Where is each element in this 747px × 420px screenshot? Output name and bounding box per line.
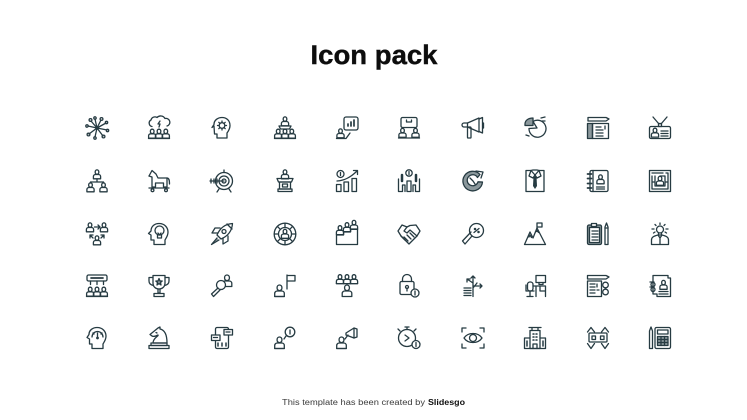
footer credit: Slidesgo bbox=[428, 398, 465, 407]
icon: chess knight bbox=[149, 327, 169, 348]
icon: megaphone bbox=[462, 118, 484, 138]
icon: team and leader bbox=[336, 275, 358, 296]
icon: clock arrow bbox=[463, 171, 483, 191]
icon: team exchange bbox=[86, 223, 108, 245]
icon: person with coin bbox=[275, 327, 295, 348]
title: Icon pack bbox=[310, 40, 439, 70]
icon: trophy bbox=[149, 276, 169, 296]
icon grid bbox=[86, 116, 671, 348]
icon: idea person bbox=[652, 223, 668, 244]
icon: board and three people bbox=[86, 275, 108, 296]
icon: rocket bbox=[212, 224, 232, 244]
icon: notepad and pencil bbox=[588, 276, 609, 296]
icon: office building bbox=[524, 328, 546, 348]
icon: handshake bbox=[398, 225, 420, 244]
icon: head with gauge bbox=[87, 328, 106, 348]
icon: wheel with person bbox=[274, 223, 296, 245]
icon: person with chart board bbox=[336, 117, 358, 138]
icon: address book bbox=[588, 170, 608, 192]
icon: clipboard and pencil bbox=[588, 223, 608, 244]
icon: stopwatch and coin bbox=[398, 327, 420, 348]
icon: person and flag bbox=[275, 275, 295, 296]
icon: person with megaphone bbox=[337, 328, 357, 348]
icon: magnifier on person bbox=[212, 275, 232, 296]
icon: people on steps bbox=[336, 220, 358, 244]
icon: profile book bbox=[650, 276, 670, 296]
icon: head with bulb bbox=[148, 224, 168, 244]
icon: video meeting bbox=[398, 118, 420, 138]
icon: pie chart bbox=[525, 117, 546, 137]
icon: calculator and pencil bbox=[650, 327, 670, 348]
icon: head with gear bbox=[212, 118, 230, 138]
icon: maze with person bbox=[650, 170, 670, 192]
icon: speaker and audience bbox=[274, 117, 296, 138]
icon: target and arrow bbox=[210, 170, 232, 192]
icon: signpost tree bbox=[464, 276, 482, 296]
icon: lock and coin bbox=[400, 274, 419, 297]
icon: desk and chair bbox=[526, 276, 546, 296]
icon: phone with chat bbox=[212, 328, 232, 348]
icon: magnifier with percent bbox=[462, 224, 484, 244]
icon: notebook and pencil bbox=[588, 118, 609, 138]
footer credit bbox=[282, 398, 465, 407]
icon: mountain and flag bbox=[524, 223, 546, 244]
icon: eye scan bbox=[462, 328, 484, 348]
icon: shirt and tie bbox=[526, 170, 544, 192]
icon: meeting table with coin bbox=[398, 170, 420, 192]
icon: speaker at podium bbox=[277, 170, 293, 192]
icon: meeting table top view bbox=[588, 328, 608, 348]
icon: cloud and team bbox=[148, 116, 170, 138]
icon: ID badge bbox=[650, 117, 670, 138]
icon: growth chart with coin bbox=[336, 170, 358, 192]
icon: trojan horse bbox=[149, 170, 170, 192]
icon: network hub bbox=[86, 117, 109, 139]
icon: org chart bbox=[87, 170, 107, 192]
footer credit: This template has been created by bbox=[282, 398, 425, 407]
